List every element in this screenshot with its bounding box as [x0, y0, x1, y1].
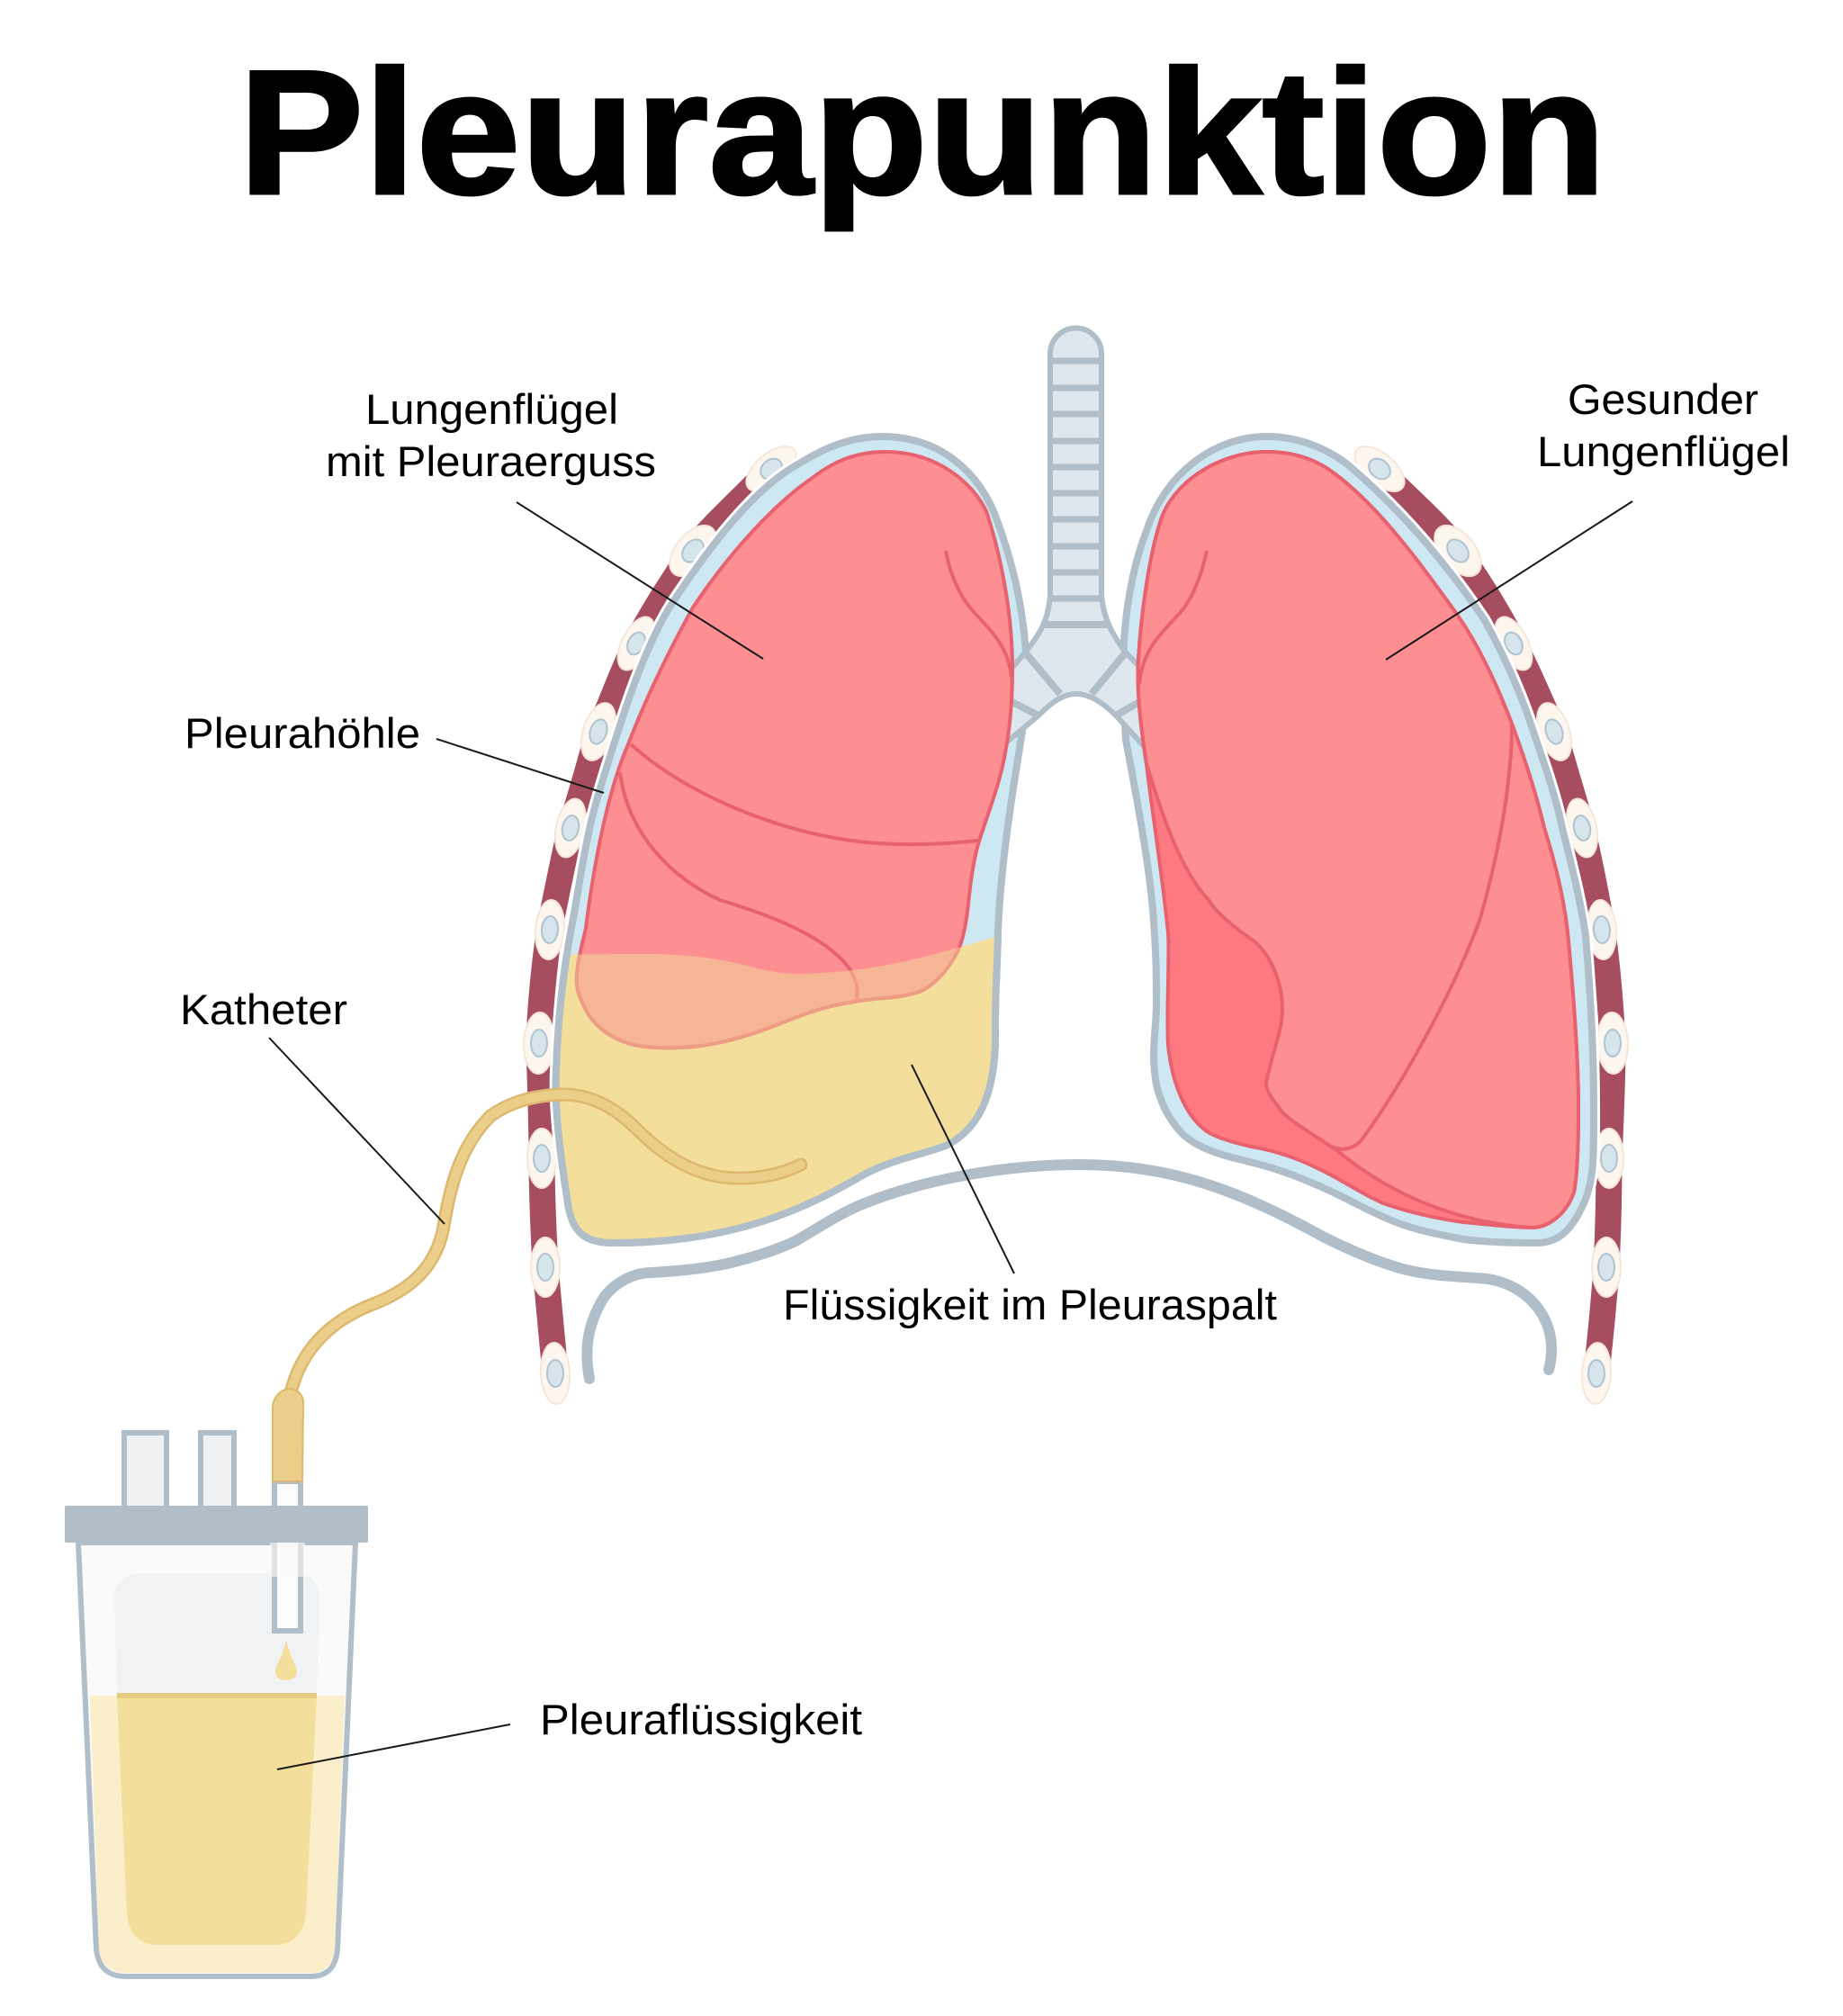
- label: diseased lung: mit Pleuraerguss: [326, 437, 656, 485]
- drop: [275, 1640, 297, 1680]
- diaphragm: [587, 1165, 1551, 1379]
- label: pleural cavity: Pleurahöhle: [184, 709, 420, 757]
- outer liquid: [90, 1696, 345, 1973]
- pleural fluid: [553, 935, 1002, 1246]
- label: healthy lung: Gesunder: [1568, 375, 1758, 423]
- liquid surface: [117, 1693, 317, 1698]
- label: fluid in pleural space: Flüssigkeit im Pleuraspalt: [783, 1281, 1277, 1328]
- catheter: [290, 1094, 801, 1397]
- trachea and bronchi: [994, 328, 1161, 765]
- lid: [65, 1506, 368, 1543]
- label: diseased lung: [326, 385, 656, 485]
- connector: [273, 1389, 303, 1481]
- drainage container: [65, 1389, 368, 1976]
- right healthy lung: [1138, 452, 1578, 1228]
- left chest wall with ribs: [523, 438, 804, 1405]
- right chest wall with ribs: [1347, 438, 1629, 1405]
- inner shading: [114, 1573, 319, 1697]
- left pleural cavity: [556, 436, 1026, 1243]
- vent stub 1: [124, 1433, 166, 1508]
- label: diseased lung: Lungenflügel: [365, 385, 618, 433]
- left lung with effusion: [577, 452, 1012, 1048]
- drip tube: [274, 1481, 301, 1631]
- title: Pleurapunktion: [238, 33, 1606, 231]
- label: pleural fluid: Pleuraflüssigkeit: [540, 1696, 862, 1743]
- label: healthy lung: Lungenflügel: [1537, 428, 1790, 475]
- vent stub 2: [201, 1433, 234, 1508]
- label: catheter: Katheter: [180, 986, 347, 1033]
- leader lines: [269, 501, 1632, 1769]
- tube fade: [270, 1543, 305, 1577]
- inner liquid: [117, 1696, 317, 1945]
- right pleural cavity: [1123, 436, 1594, 1243]
- label: healthy lung: [1537, 375, 1790, 475]
- container body: [78, 1543, 355, 1976]
